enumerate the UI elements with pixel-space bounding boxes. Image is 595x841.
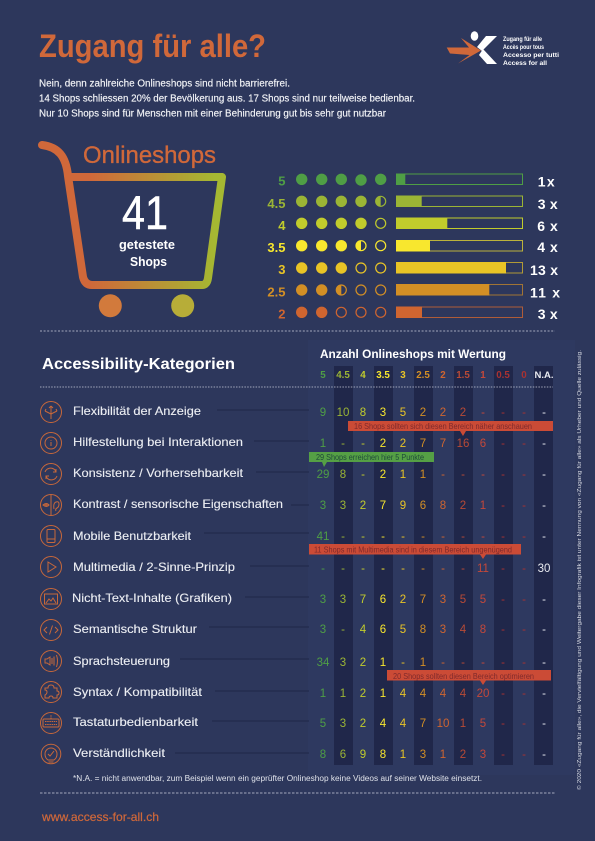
data row: Multimedia: - [361,563,365,575]
data row: Kontrast: 3 [340,500,346,512]
data row: Semantische Struktur: 6 [380,624,386,636]
intro text: Nur 10 Shops sind für Menschen mit einer Behinderung gut bis sehr gut nutzbar [39,108,387,120]
callout: 11 shops: 11 Shops mit Multimedia sind in diesem Bereich ungenügend [314,544,512,554]
data row: Sprachsteuerung: - [401,657,405,669]
callout: 29 shops [309,452,434,467]
category: Semantische Struktur: Semantische Struktur [73,622,197,636]
data row: Tastatur: 7 [420,718,426,730]
category: Sprachsteuerung [40,650,170,672]
rating row 3.5: 4 x [537,239,558,255]
rating row 5 [278,174,555,190]
data row: Hilfestellung: - [501,438,505,450]
table header scores: 3 [400,370,406,381]
table header scores: 1 [480,370,486,381]
logo: Accès pour tous [503,44,544,51]
data row: Hilfestellung: 7 [420,438,426,450]
data row: Kontrast: - [542,500,546,512]
data row: Multimedia [321,563,550,575]
logo [447,31,559,67]
data row: Hilfestellung [320,438,546,450]
data row: Hilfestellung: 7 [440,438,446,450]
rating distribution [267,174,560,322]
data row: Konsistenz: 8 [340,469,346,481]
data row: Semantische Struktur [320,624,546,636]
category: Konsistenz [40,464,244,484]
category: Sprachsteuerung: Sprachsteuerung [73,654,170,668]
data row: Verständlichkeit: 9 [360,749,366,761]
data row: Multimedia: - [501,563,505,575]
data row: Syntax: 4 [440,688,447,700]
rating row 5: 5 [278,174,286,188]
table header scores: 4.5 [336,370,350,381]
data row: Konsistenz: 29 [317,469,329,481]
data row: Konsistenz: - [461,469,465,481]
data row: Sprachsteuerung [317,657,546,669]
data row: Kontrast: - [522,500,526,512]
data row: Tastatur: - [501,718,505,730]
table header scores: 1.5 [456,370,470,381]
data row: Flexibilität: - [501,407,505,419]
data row: Nicht-Text-Inhalte: 5 [460,594,466,606]
data row: Sprachsteuerung: 34 [317,657,330,669]
shopping cart with total: Shops [130,254,167,269]
data row: Multimedia: 30 [538,563,550,575]
data row: Verständlichkeit: 6 [340,749,346,761]
table header scores: 4 [360,370,366,381]
callout: 16 shops [348,421,553,436]
rating row 4: 4 [278,218,286,233]
data row: Nicht-Text-Inhalte: 5 [480,594,486,606]
data row: Semantische Struktur: 3 [440,624,446,636]
data row: Kontrast: - [501,500,505,512]
rating row 3.5 [267,239,558,255]
data row: Kontrast: 2 [460,500,466,512]
data row: Verständlichkeit: 8 [380,749,386,761]
data row: Semantische Struktur: - [341,624,345,636]
section heading: categories: Accessibility-Kategorien [42,356,235,373]
category: Verständlichkeit [41,744,166,764]
rating row 4.5: 4.5 [267,196,286,211]
table header scores: 3.5 [376,370,390,381]
data row: Nicht-Text-Inhalte [320,594,546,606]
logo: Accesso per tutti [503,52,559,59]
data row: Konsistenz: 2 [380,469,386,481]
data row: Verständlichkeit: - [522,749,526,761]
shopping cart with total [42,142,222,317]
data row: Syntax: 4 [400,688,407,700]
data row: Sprachsteuerung: 2 [360,657,366,669]
rating row 2.5: 2.5 [267,285,286,300]
data row: Multimedia: - [321,563,325,575]
category: Konsistenz: Konsistenz / Vorhersehbarkeit [73,466,244,480]
data row: Flexibilität: - [542,407,546,419]
data row: Semantische Struktur: 4 [360,624,367,636]
data row: Flexibilität: 2 [440,407,446,419]
category: Nicht-Text-Inhalte [40,588,232,610]
data row: Sprachsteuerung: - [522,657,526,669]
data row: Tastatur: 5 [320,718,326,730]
rating row 3: 3 [278,262,286,277]
data row: Syntax: 4 [460,688,467,700]
rating row 4 [278,218,558,234]
data row: Semantische Struktur: - [542,624,546,636]
callout: 20 shops [387,670,551,685]
callout: 29 shops: 29 Shops erreichen hier 5 Punkte [316,452,424,462]
data row: Nicht-Text-Inhalte: 3 [340,594,346,606]
data row: Tastatur: - [522,718,526,730]
data row: Mobile: - [441,531,445,543]
data row: Semantische Struktur: - [501,624,505,636]
intro text: Nein, denn zahlreiche Onlineshops sind nicht barrierefrei. [39,78,290,90]
category: Semantische Struktur [40,620,197,640]
data row: Tastatur: 1 [460,718,466,730]
data row: Verständlichkeit [320,749,546,761]
shopping cart with total: 41 [122,186,168,239]
rating row 2: 2 [278,307,286,322]
data row: Sprachsteuerung: - [501,657,505,669]
data row: Verständlichkeit: 1 [440,749,446,761]
logo: Access for all [503,60,547,67]
data row: Mobile: - [341,531,345,543]
section heading: ratings: Anzahl Onlineshops mit Wertung [320,347,506,361]
data row: Verständlichkeit: - [542,749,546,761]
data row: Mobile [317,531,546,543]
data row: Multimedia: 11 [477,563,489,575]
data row: Multimedia: - [522,563,526,575]
table header scores [320,370,554,381]
data row: Kontrast [320,500,546,512]
data row: Flexibilität [320,407,546,419]
data row: Konsistenz [317,469,546,481]
data row: Syntax: 1 [320,688,326,700]
rating row 3 [278,262,558,278]
data row: Hilfestellung: - [522,438,526,450]
data row: Konsistenz: - [522,469,526,481]
rating row 3: 13 x [530,262,558,278]
data row: Verständlichkeit: 2 [460,749,466,761]
data row: Tastatur: 2 [360,718,366,730]
category: Tastatur: Tastaturbedienbarkeit [73,715,199,729]
data row: Syntax: - [542,688,546,700]
data row: Flexibilität: - [481,407,485,419]
callout: 20 shops: 20 Shops sollten diesen Bereich optimieren [393,671,534,681]
table header scores: 0 [521,370,527,381]
data row: Mobile: - [361,531,365,543]
data row: Nicht-Text-Inhalte: 3 [320,594,326,606]
data row: Hilfestellung: 16 [457,438,469,450]
rating row 3.5: 3.5 [267,240,286,255]
data row: Semantische Struktur: 5 [400,624,406,636]
logo: Zugang für alle [503,36,542,43]
data row: Mobile: - [542,531,546,543]
data row: Tastatur: 4 [400,718,407,730]
table header scores: 0.5 [496,370,510,381]
data row: Mobile: - [481,531,485,543]
data row: Nicht-Text-Inhalte: - [522,594,526,606]
data row: Tastatur: 4 [380,718,387,730]
intro text: 14 Shops schliessen 20% der Bevölkerung aus. 17 Shops sind nur teilweise bedienbar. [39,94,415,104]
data row: Syntax: 20 [477,688,489,700]
data row: Syntax: 2 [360,688,366,700]
data row: Sprachsteuerung: - [481,657,485,669]
rating row 5: 1 x [538,174,555,190]
data row: Flexibilität: 3 [380,407,386,419]
data row: Multimedia: - [421,563,425,575]
data row: Syntax: 1 [340,688,346,700]
table header scores: 2.5 [416,370,430,381]
footnote: *N.A. = nicht anwendbar, zum Beispiel wenn ein geprüfter Onlineshop keine Videos auf seiner Website einsetzt. [73,774,482,783]
data row: Sprachsteuerung: 1 [380,657,386,669]
data row: Tastatur: - [542,718,546,730]
category: Mobile: Mobile Benutzbarkeit [73,529,192,543]
data row: Sprachsteuerung: - [542,657,546,669]
data row: Verständlichkeit: 3 [420,749,426,761]
copyright note: © 2020 «Zugang für alle», die Vervielfältigung und Weitergabe dieser Infografik ist unter Nennung von «Zugang für alle» als Urheber und Quelle zulässig. [576,350,583,790]
data row: Flexibilität: - [522,407,526,419]
category: Hilfestellung [40,432,243,454]
data row: Sprachsteuerung: 1 [420,657,426,669]
data row: Kontrast: 9 [400,500,406,512]
rating row 4.5 [267,196,558,212]
data row: Semantische Struktur: 8 [420,624,426,636]
data row: Konsistenz: - [542,469,546,481]
data row: Multimedia: - [441,563,445,575]
data row: Hilfestellung: - [361,438,365,450]
category: Verständlichkeit: Verständlichkeit [73,746,166,760]
data row: Sprachsteuerung: - [441,657,445,669]
data row: Syntax: 4 [420,688,427,700]
data row: Konsistenz: - [481,469,485,481]
rating row 2.5: 11 x [530,285,560,301]
category: Flexibilität [40,402,201,422]
data row: Kontrast: 3 [320,500,326,512]
data row: Tastatur [320,718,546,730]
data row: Nicht-Text-Inhalte: - [501,594,505,606]
data row: Mobile: - [401,531,405,543]
category: Hilfestellung: Hilfestellung bei Interaktionen [73,435,243,449]
data row: Konsistenz: - [361,469,365,481]
data row: Mobile: - [381,531,385,543]
category: Nicht-Text-Inhalte: Nicht-Text-Inhalte (Grafiken) [72,591,232,605]
category: Multimedia [40,556,235,578]
data row: Semantische Struktur: 8 [480,624,486,636]
data row: Flexibilität: 10 [337,407,349,419]
data row: Kontrast: 2 [360,500,366,512]
category: Syntax [40,682,203,702]
data row: Flexibilität: 8 [360,407,366,419]
data row: Sprachsteuerung: 3 [340,657,346,669]
data row: Hilfestellung: 1 [320,438,326,450]
data row: Multimedia: - [341,563,345,575]
category: Kontrast [40,494,283,516]
callout: 11 shops [309,544,521,559]
data row: Hilfestellung: 2 [400,438,406,450]
table columns background [308,340,575,775]
data row: Syntax: - [501,688,505,700]
data row: Konsistenz: 1 [420,469,426,481]
rating row 2.5 [267,284,560,301]
website link: www.access-for-all.ch [41,810,159,824]
data row: Nicht-Text-Inhalte: 3 [440,594,446,606]
data row: Mobile: 41 [317,531,329,543]
title: Zugang für alle? [39,28,266,64]
rating row 2 [278,306,558,322]
table header scores: 2 [440,370,446,381]
data row: Verständlichkeit: - [501,749,505,761]
data row: Nicht-Text-Inhalte: - [542,594,546,606]
data row: Kontrast: 8 [440,500,446,512]
data row: Verständlichkeit: 8 [320,749,326,761]
data row: Tastatur: 10 [437,718,449,730]
data row: Kontrast: 1 [480,500,486,512]
data row: Tastatur: 5 [480,718,486,730]
data row: Nicht-Text-Inhalte: 7 [360,594,366,606]
rating row 4.5: 3 x [538,196,558,212]
data row: Flexibilität: 5 [400,407,406,419]
category: Kontrast: Kontrast / sensorische Eigenschaften [73,497,283,511]
data row: Semantische Struktur: - [522,624,526,636]
data row: Verständlichkeit: 1 [400,749,406,761]
data row: Syntax [320,688,546,700]
data row: Verständlichkeit: 3 [480,749,486,761]
data row: Nicht-Text-Inhalte: 6 [380,594,386,606]
table header scores: 5 [320,370,326,381]
category: Syntax: Syntax / Kompatibilität [73,685,203,699]
data row: Nicht-Text-Inhalte: 7 [420,594,426,606]
rating row 4: 6 x [537,218,558,234]
callout: 16 shops: 16 Shops sollten sich diesen Bereich näher anschauen [354,421,532,431]
category: Mobile [40,526,192,546]
table header scores: N.A. [534,370,554,381]
data row: Multimedia: - [401,563,405,575]
data row: Flexibilität: 2 [420,407,426,419]
category: Tastatur [40,712,199,734]
rating row 2: 3 x [538,306,558,322]
data row: Sprachsteuerung: - [461,657,465,669]
data row: Kontrast: 6 [420,500,426,512]
data row: Mobile: - [501,531,505,543]
data row: Flexibilität: 9 [320,407,326,419]
shopping cart with total: Onlineshops [83,142,216,169]
data row: Syntax: 1 [380,688,386,700]
data row: Multimedia: - [381,563,385,575]
data row: Hilfestellung: - [341,438,345,450]
data row: Hilfestellung: 2 [380,438,386,450]
data row: Mobile: - [421,531,425,543]
data row: Konsistenz: - [441,469,445,481]
data row: Semantische Struktur: 4 [460,624,467,636]
data row: Konsistenz: - [501,469,505,481]
data row: Hilfestellung: 6 [480,438,486,450]
category: Multimedia: Multimedia / 2-Sinne-Prinzip [73,560,235,574]
data row: Mobile: - [522,531,526,543]
shopping cart with total: getestete [119,237,175,252]
data row: Konsistenz: 1 [400,469,406,481]
data row: Kontrast: 7 [380,500,386,512]
data row: Hilfestellung: - [542,438,546,450]
data row: Flexibilität: 2 [460,407,466,419]
data row: Multimedia: - [461,563,465,575]
data row: Tastatur: 3 [340,718,346,730]
data row: Nicht-Text-Inhalte: 2 [400,594,406,606]
data row: Mobile: - [461,531,465,543]
intro text [39,78,415,120]
data row: Syntax: - [522,688,526,700]
category: Flexibilität: Flexibilität der Anzeige [73,404,201,418]
data row: Semantische Struktur: 3 [320,624,326,636]
